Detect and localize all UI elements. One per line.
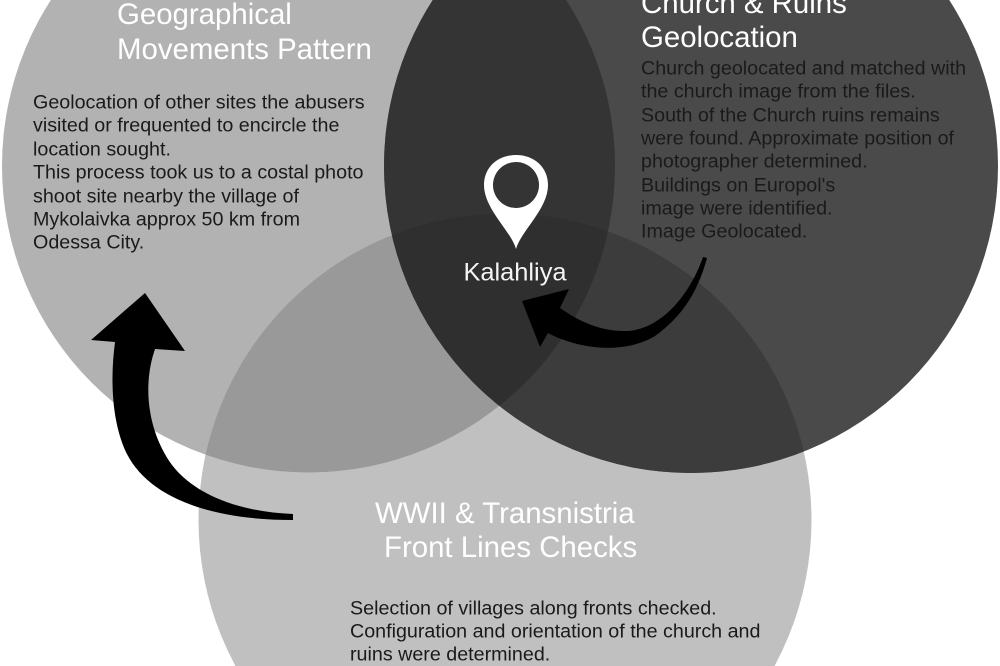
- panel text: geographical movements: [33, 0, 372, 254]
- body text: geographical movements: Odessa City.: [33, 232, 144, 254]
- body text: front lines: ruins were determined.: [350, 644, 550, 666]
- overlap: left and bottom: [206, 236, 499, 472]
- body text: church and ruins: photographer determined.: [641, 150, 868, 172]
- body text: church and ruins: Image Geolocated.: [641, 220, 807, 242]
- body text: geographical movements: This process took us to a costal photo: [33, 162, 364, 184]
- body text: geographical movements: Mykolaivka approx 50 km from: [33, 208, 300, 230]
- arrow: to Kalahliya pin: [522, 257, 707, 348]
- icon: map pin: [484, 155, 548, 249]
- heading: geographical movements pattern: Movements Pattern: [117, 33, 372, 66]
- body text: geographical movements: visited or frequented to encircle the: [33, 114, 339, 136]
- body text: church and ruins: were found. Approximate position of: [640, 128, 955, 150]
- body text: front lines: Configuration and orientation of the church and: [350, 620, 760, 642]
- body text: church and ruins: image were identified.: [641, 198, 833, 220]
- body text: geographical movements: location sought.: [33, 138, 171, 160]
- arrow: to Geographical Movements circle: [91, 293, 293, 520]
- heading: WWII and Transnistria front lines checks: [375, 497, 637, 564]
- overlap: left and right: [384, 0, 615, 406]
- heading: geographical movements pattern: [117, 0, 372, 66]
- body text: church and ruins: Church geolocated and matched with: [641, 58, 966, 80]
- body text: front lines: [350, 598, 760, 666]
- circle: geographical movements: [2, 0, 615, 472]
- body text: geographical movements: shoot site nearby the village of: [33, 186, 299, 208]
- body text: geographical movements: [33, 92, 365, 254]
- panel text: front lines: [350, 497, 760, 666]
- circle: church and ruins: [384, 0, 998, 473]
- body text: church and ruins: [640, 58, 966, 242]
- heading: WWII and Transnistria front lines checks: Front Lines Checks: [384, 531, 637, 564]
- overlap: centre: [392, 236, 500, 406]
- label: Kalahliya: Kalahliya: [463, 258, 567, 286]
- body text: front lines: Selection of villages along fronts checked.: [350, 598, 717, 620]
- panel text: church and ruins: [640, 0, 966, 242]
- body text: church and ruins: Buildings on Europol's: [641, 174, 835, 196]
- overlap: right and bottom: [392, 232, 804, 473]
- heading: church and ruins geolocation: Geolocation: [641, 21, 798, 54]
- circle: WWII front lines: [198, 214, 812, 666]
- body text: geographical movements: Geolocation of other sites the abusers: [33, 92, 365, 114]
- heading: church and ruins geolocation: [641, 0, 847, 54]
- body text: church and ruins: the church image from the files.: [641, 80, 916, 102]
- heading: WWII and Transnistria front lines checks: WWII & Transnistria: [375, 497, 635, 530]
- body text: church and ruins: South of the Church ruins remains: [641, 104, 940, 126]
